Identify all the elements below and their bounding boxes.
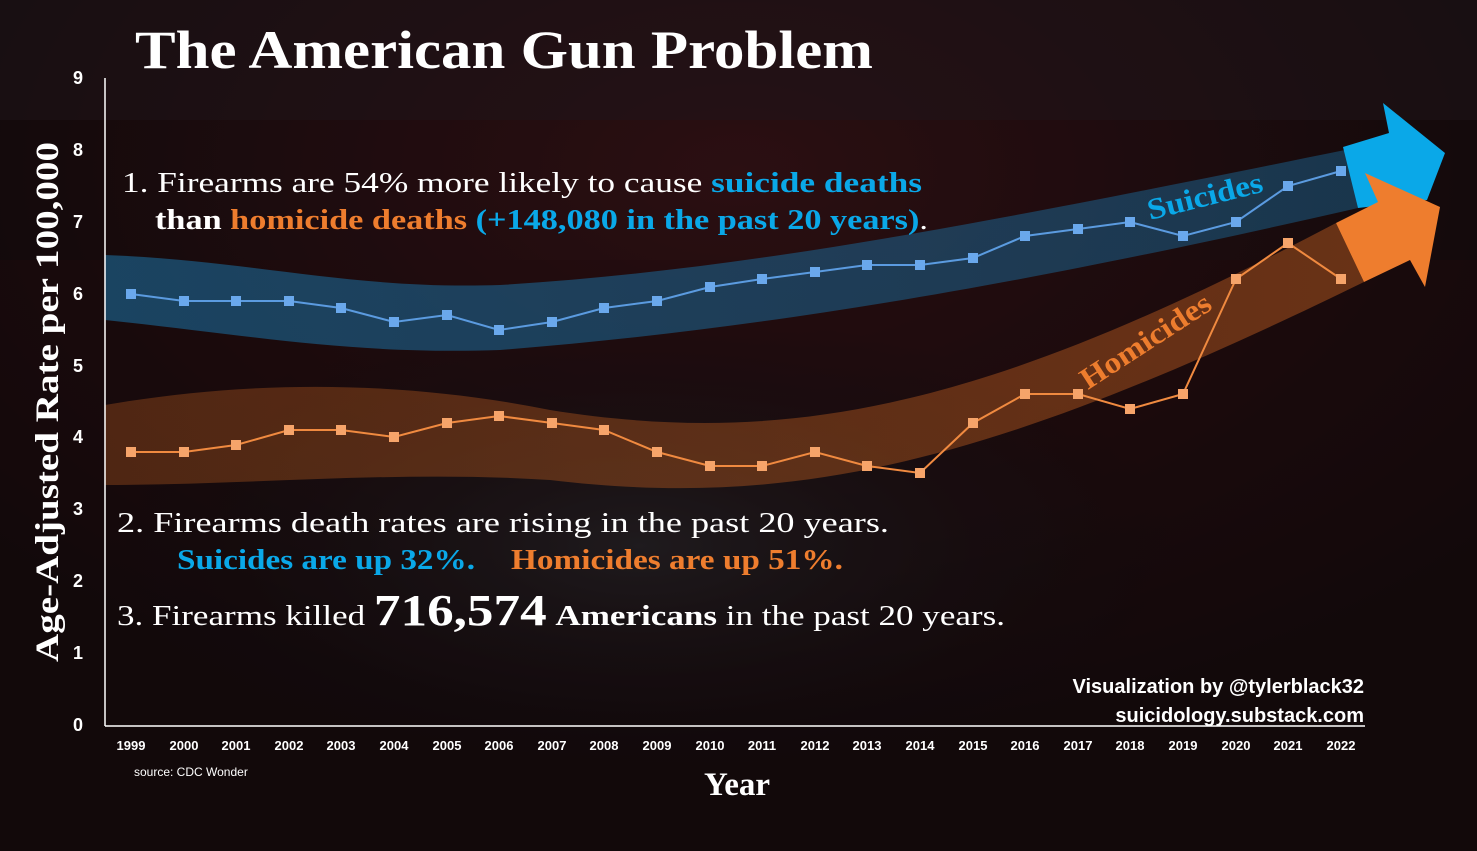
x axis labels: 2007 — [538, 738, 566, 753]
y axis ticks: 7 — [73, 212, 83, 232]
finding 2: 2. Firearms death rates are rising in the past 20 years. — [117, 507, 889, 539]
x axis labels: 2009 — [643, 738, 671, 753]
finding 1: 1. Firearms are 54% more likely to cause suicide deaths — [122, 167, 922, 199]
y axis ticks: 1 — [73, 643, 83, 663]
x axis labels: 2008 — [590, 738, 618, 753]
x axis labels: 2005 — [433, 738, 461, 753]
x axis labels: 1999 — [117, 738, 145, 753]
x axis labels: 2003 — [327, 738, 355, 753]
x axis labels: 2021 — [1274, 738, 1302, 753]
arrowhead: suicides — [1343, 103, 1445, 208]
finding 2 — [117, 507, 889, 576]
arrowhead: homicides — [1336, 173, 1440, 287]
series label: Homicides: Homicides — [1074, 286, 1218, 396]
finding 2: Homicides are up 51%. — [511, 544, 843, 576]
x axis labels: 2015 — [959, 738, 987, 753]
y axis ticks: 6 — [73, 284, 83, 304]
x axis labels: 2018 — [1116, 738, 1144, 753]
finding 1: than homicide deaths (+148,080 in the past 20 years) . — [155, 204, 928, 236]
homicides line — [126, 238, 1346, 478]
x axis labels: 2004 — [380, 738, 409, 753]
y axis title: Age-Adjusted Rate per 100,000 — [30, 142, 66, 662]
suicides line — [126, 166, 1346, 335]
y axis ticks: 8 — [73, 140, 83, 160]
band: homicides trend — [105, 173, 1440, 488]
x axis labels — [117, 738, 1355, 753]
y axis ticks: 4 — [73, 427, 83, 447]
band: suicides trend — [105, 103, 1445, 351]
x axis labels: 2002 — [275, 738, 303, 753]
x axis labels: 2019 — [1169, 738, 1197, 753]
y axis ticks: 0 — [73, 715, 83, 735]
finding 2: Suicides are up 32%. — [177, 544, 475, 576]
x axis labels: 2020 — [1222, 738, 1250, 753]
y axis ticks — [73, 68, 83, 735]
y axis ticks: 9 — [73, 68, 83, 88]
series label: Suicides: Suicides — [1144, 166, 1266, 227]
credit: Visualization by @tylerblack32 — [1073, 676, 1364, 698]
x axis labels: 2016 — [1011, 738, 1039, 753]
x axis labels: 2012 — [801, 738, 829, 753]
x axis labels: 2014 — [906, 738, 935, 753]
finding 1 — [122, 167, 928, 236]
y axis ticks: 2 — [73, 571, 83, 591]
credit: suicidology.substack.com — [1115, 705, 1364, 727]
credit — [1073, 676, 1364, 727]
x axis labels: 2022 — [1327, 738, 1355, 753]
x axis labels: 2006 — [485, 738, 513, 753]
x axis title: Year — [704, 767, 770, 803]
x axis labels: 2000 — [170, 738, 198, 753]
x axis labels: 2001 — [222, 738, 250, 753]
y axis ticks: 5 — [73, 356, 83, 376]
axes — [105, 78, 1365, 726]
x axis labels: 2010 — [696, 738, 724, 753]
source note: source: CDC Wonder — [134, 765, 248, 779]
finding 3: 3. Firearms killed 716,574 Americans in the past 20 years. — [117, 586, 1005, 635]
x axis labels: 2011 — [748, 738, 776, 753]
title: The American Gun Problem — [135, 20, 873, 80]
y axis ticks: 3 — [73, 499, 83, 519]
x axis labels: 2017 — [1064, 738, 1092, 753]
x axis labels: 2013 — [853, 738, 881, 753]
